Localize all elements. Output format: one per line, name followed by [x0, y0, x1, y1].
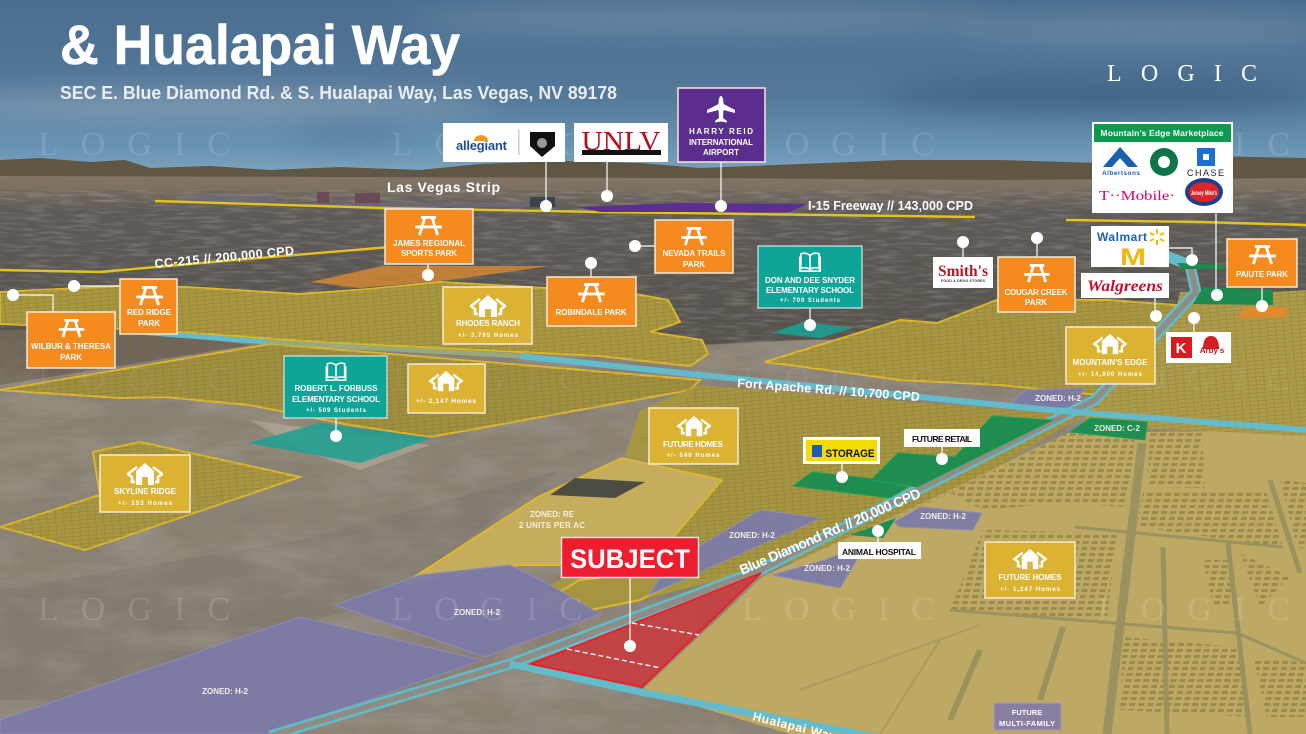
- callout: James Regional Sports Park: [385, 209, 473, 281]
- callout: Red Ridge Park: PARK: [138, 319, 160, 328]
- callout: Mountain's Edge Marketplace: [1092, 122, 1233, 301]
- subject callout: SUBJECT: [570, 544, 690, 574]
- zoning overlay: purple H-2 parcels: [0, 388, 1085, 734]
- callout: Cougar Creek Park: [998, 232, 1075, 312]
- address: SEC E. Blue Diamond Rd. & S. Hualapai Way, Las Vegas, NV 89178: [60, 83, 617, 103]
- callout: Wilbur & Theresa Park: WILBUR & THERESA: [31, 342, 111, 351]
- housing blocks and street grid, lower right: [800, 432, 1306, 734]
- callout: Animal Hospital: ANIMAL HOSPITAL: [842, 547, 916, 557]
- callout: Walmart and McDonald's: Walmart: [1097, 230, 1147, 244]
- label: future multi-family: FUTURE: [1012, 708, 1042, 717]
- zoning labels: ZONED: H-2: [804, 564, 850, 573]
- callout: Rhodes Ranch: RHODES RANCH: [456, 319, 520, 328]
- callout: Walgreens: [1081, 273, 1169, 322]
- watermarks: LOGIC: [38, 126, 230, 163]
- distant mountains and far desert: [0, 156, 1306, 347]
- zoning labels: ZONED: H-2: [920, 512, 966, 521]
- callout: Smith's: FOOD & DRUG STORES: [941, 279, 986, 283]
- callout: Mountain's Edge: [1066, 327, 1155, 384]
- callout: Future Homes 540: [649, 408, 738, 464]
- watermarks: LOGIC: [392, 126, 582, 163]
- zoning labels: ZONED: H-2: [454, 608, 500, 617]
- callout: Snyder Elementary School: ELEMENTARY SCHOOL: [766, 286, 854, 295]
- callout: Mountain's Edge Marketplace: Mountain's Edge Marketplace: [1100, 128, 1224, 138]
- callout: Walmart and McDonald's: M: [1120, 244, 1146, 271]
- callout: Animal Hospital: [838, 525, 921, 559]
- road labels: I-15 Freeway // 143,000 CPD: [808, 199, 973, 213]
- callout: Cougar Creek Park: PARK: [1025, 298, 1047, 307]
- callout: Storage: STORAGE: [826, 448, 874, 460]
- roads: [0, 201, 1306, 734]
- callout: Nevada Trails Park: NEVADA TRAILS: [662, 249, 726, 258]
- zoning labels: ZONED: RE: [530, 510, 575, 519]
- title: & Hualapai Way: [60, 13, 460, 76]
- watermarks: LOGIC: [38, 591, 230, 628]
- callout: Rhodes Ranch: +/- 3,795 Homes: [458, 333, 519, 339]
- callout: Wilbur & Theresa Park: [7, 289, 115, 368]
- zoning overlay: residential tracts: [0, 282, 1306, 734]
- zoning labels: [202, 394, 1140, 696]
- callout: Circle K and Arby's: [1166, 312, 1231, 363]
- callout: Harry Reid airport: AIRPORT: [703, 148, 739, 157]
- callout: Red Ridge Park: RED RIDGE: [127, 308, 172, 317]
- road labels: Las Vegas Strip: [387, 179, 500, 195]
- Las Vegas skyline: [185, 192, 555, 207]
- callout: UNLV: UNLV: [582, 126, 661, 156]
- amenity parcels: [248, 203, 1287, 538]
- callout: Circle K and Arby's: K: [1176, 340, 1187, 357]
- watermarks: LOGIC: [1098, 591, 1290, 628]
- logo: LOGIC: [1107, 61, 1257, 87]
- callout: Paiute Park: [1227, 239, 1297, 312]
- callout: Future Homes 540: +/- 540 Homes: [666, 453, 720, 459]
- subject callout: [562, 538, 698, 652]
- zoning labels: ZONED: H-2: [1035, 394, 1081, 403]
- callout: Future Retail: FUTURE RETAIL: [912, 434, 972, 444]
- callout: Forbuss Elementary School: [284, 356, 387, 442]
- callout: Snyder Elementary School: +/- 700 Students: [780, 298, 841, 304]
- callout: Harry Reid airport: HARRY REID: [689, 127, 753, 136]
- callout: Forbuss Elementary School: +/- 509 Students: [306, 408, 367, 414]
- callout: Red Ridge Park: [68, 279, 177, 334]
- sky background: [0, 0, 1306, 180]
- zoning labels: ZONED: H-2: [729, 531, 775, 540]
- road labels: Blue Diamond Rd. // 20,000 CPD: [737, 485, 923, 578]
- callout: Smith's: Smith's: [938, 263, 988, 280]
- watermarks: LOGIC: [1098, 126, 1290, 163]
- watermarks: [38, 126, 1290, 628]
- callout: Snyder Elementary School: [758, 246, 862, 331]
- callout: Future Homes 1,247: FUTURE HOMES: [998, 573, 1062, 582]
- foreground desert: [0, 330, 1306, 734]
- callout: Cougar Creek Park: COUGAR CREEK: [1004, 288, 1068, 297]
- watermarks: LOGIC: [742, 591, 934, 628]
- callout: Future Homes 1,247: +/- 1,247 Homes: [1000, 587, 1061, 593]
- callout: Paiute Park: PAIUTE PARK: [1236, 270, 1288, 279]
- callout: Skyline Ridge: SKYLINE RIDGE: [114, 487, 177, 496]
- road labels: [154, 179, 973, 734]
- callout: Forbuss Elementary School: ROBERT L. FORBUSS: [294, 384, 378, 393]
- callout: Smith's: [933, 236, 993, 288]
- watermarks: LOGIC: [392, 361, 582, 398]
- callout: Mountain's Edge: MOUNTAIN'S EDGE: [1072, 358, 1148, 367]
- watermarks: LOGIC: [392, 591, 582, 628]
- callout: Harry Reid airport: [678, 88, 765, 212]
- callout: Walmart and McDonald's: [1091, 226, 1198, 271]
- callout: Mountain's Edge Marketplace: Albertsons: [1102, 170, 1140, 177]
- callout: Allegiant / Raiders: allegiant: [456, 138, 508, 153]
- callout: Allegiant / Raiders: [443, 123, 565, 212]
- road labels: Fort Apache Rd. // 10,700 CPD: [737, 376, 920, 404]
- callout: Nevada Trails Park: PARK: [683, 260, 705, 269]
- callout: Snyder Elementary School: DON AND DEE SNYDER: [765, 276, 855, 285]
- callout: Rhodes Ranch: [443, 287, 532, 344]
- callout: Skyline Ridge: +/- 153 Homes: [118, 501, 173, 507]
- zoning labels: 2 UNITS PER AC: [519, 521, 585, 530]
- callout: Robindale Park: [547, 257, 636, 326]
- callout: Mountain's Edge Marketplace: CHASE: [1187, 168, 1224, 178]
- zoning labels: ZONED: C-2: [1094, 424, 1140, 433]
- watermarks: LOGIC: [38, 361, 230, 398]
- callout: Storage: [803, 437, 880, 483]
- callout: Skyline Ridge: [100, 455, 190, 512]
- callout: Circle K and Arby's: Arby's: [1200, 346, 1225, 355]
- callout: 2,147 homes: [408, 364, 485, 413]
- callout: Future Homes 1,247: [985, 542, 1075, 598]
- callout: Walgreens: Walgreens: [1087, 278, 1163, 295]
- callout: James Regional Sports Park: SPORTS PARK: [401, 249, 457, 258]
- callout: Robindale Park: ROBINDALE PARK: [556, 308, 627, 317]
- callout: Wilbur & Theresa Park: PARK: [60, 353, 82, 362]
- label: future multi-family: MULTI-FAMILY: [999, 719, 1055, 728]
- callout: UNLV: [574, 123, 668, 202]
- callout: Mountain's Edge: +/- 14,000 Homes: [1078, 372, 1143, 378]
- road labels: CC-215 // 200,000 CPD: [154, 244, 295, 271]
- callout: Harry Reid airport: INTERNATIONAL: [689, 138, 753, 147]
- watermarks: LOGIC: [742, 361, 934, 398]
- callout: James Regional Sports Park: JAMES REGIONAL: [393, 239, 465, 248]
- subject parcel: [531, 573, 761, 687]
- callout: Mountain's Edge Marketplace: T··Mobile·: [1099, 189, 1175, 204]
- callout: Future Homes 540: FUTURE HOMES: [663, 440, 724, 449]
- zoning labels: ZONED: H-2: [202, 687, 248, 696]
- watermarks: LOGIC: [1098, 361, 1290, 398]
- callout: Forbuss Elementary School: ELEMENTARY SCHOOL: [292, 395, 380, 404]
- label: future multi-family: [994, 703, 1061, 730]
- watermarks: LOGIC: [742, 126, 934, 163]
- callout: Nevada Trails Park: [629, 220, 733, 273]
- callout: Future Retail: [904, 429, 980, 465]
- callout: 2,147 homes: +/- 2,147 Homes: [416, 398, 476, 405]
- callout: Mountain's Edge Marketplace: Jersey Mike's: [1191, 190, 1217, 197]
